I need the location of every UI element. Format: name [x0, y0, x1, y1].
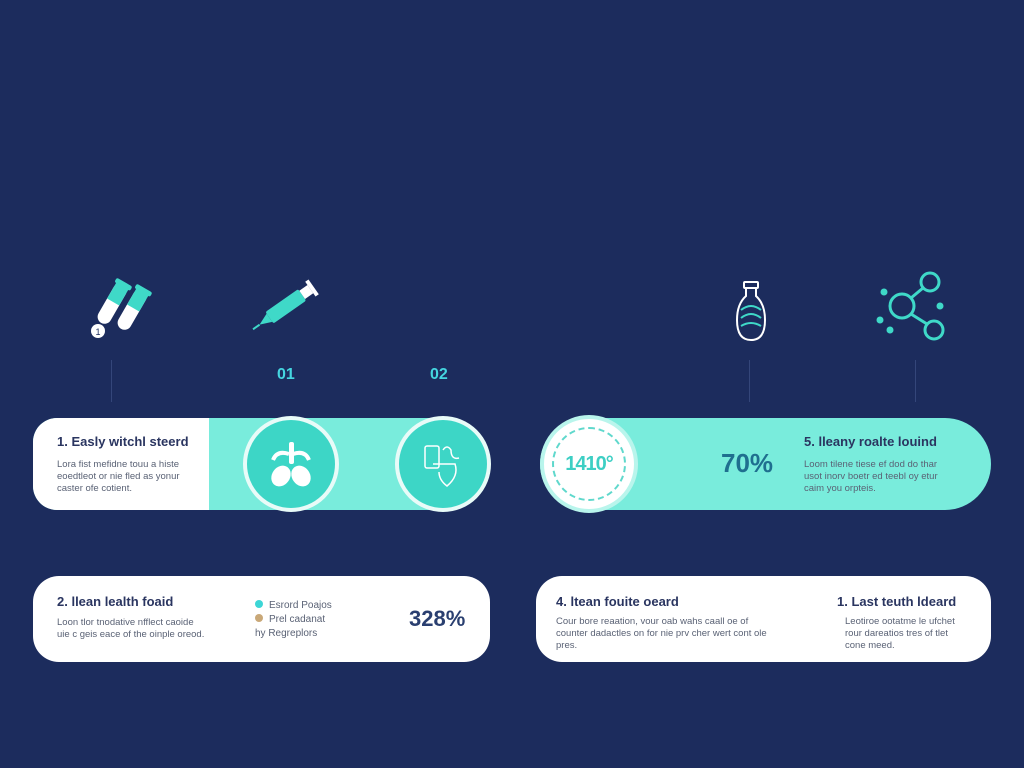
- heading 1: 1. Easly witchl steerd: [57, 434, 189, 449]
- legend: [255, 600, 332, 639]
- icon: test tubes: 1: [95, 327, 101, 337]
- panel: card 5: [540, 418, 991, 510]
- label 01: 01: [277, 366, 295, 383]
- heading 5: 5. lleany roalte louind: [804, 434, 937, 449]
- icon: bottle: [736, 281, 766, 341]
- text 1b: Leotiroe ootatme le ufchet rour dareatios tres of tlet cone meed.: [845, 616, 955, 651]
- stat 70%: 70%: [721, 448, 773, 478]
- legend: hy Regreplors: [255, 628, 317, 639]
- stat circle 1410: [540, 415, 638, 513]
- legend: Esrord Poajos: [269, 600, 332, 611]
- stat circle 1410: 1410°: [565, 453, 613, 475]
- heading 2: 2. llean lealth foaid: [57, 594, 173, 609]
- icon: molecule: [876, 272, 944, 340]
- text 1: Lora fist mefidne touu a histe eoedtleot or nie fled as yonur caster ofe cotient.: [57, 459, 180, 494]
- heading 4: 4. ltean fouite oeard: [556, 594, 679, 609]
- heading 1b: 1. Last teuth ldeard: [837, 594, 956, 609]
- icon: syringe: [252, 280, 319, 330]
- text 2: Loon tlor tnodative nfflect caoide uie c geis eace of the oinple oreod.: [57, 617, 204, 640]
- white left section: [33, 418, 209, 510]
- panel: card 1: [33, 418, 490, 510]
- icon circle: lungs: [243, 416, 339, 512]
- text 5: Loom tilene tiese ef dod do thar usot inorv boetr ed teebl oy etur caim you orpteis.: [804, 459, 938, 494]
- icon circle: face: [395, 416, 491, 512]
- text 4: Cour bore reaation, vour oab wahs caall oe of counter dadactles on for nie prv cher wert cont ole pres.: [556, 616, 767, 651]
- icon: test tubes: [91, 278, 152, 338]
- panel: card 2: [33, 576, 490, 662]
- legend: Prel cadanat: [269, 614, 325, 625]
- stat 328%: 328%: [409, 606, 465, 631]
- panel: card 4: [536, 576, 991, 662]
- label 02: 02: [430, 366, 448, 383]
